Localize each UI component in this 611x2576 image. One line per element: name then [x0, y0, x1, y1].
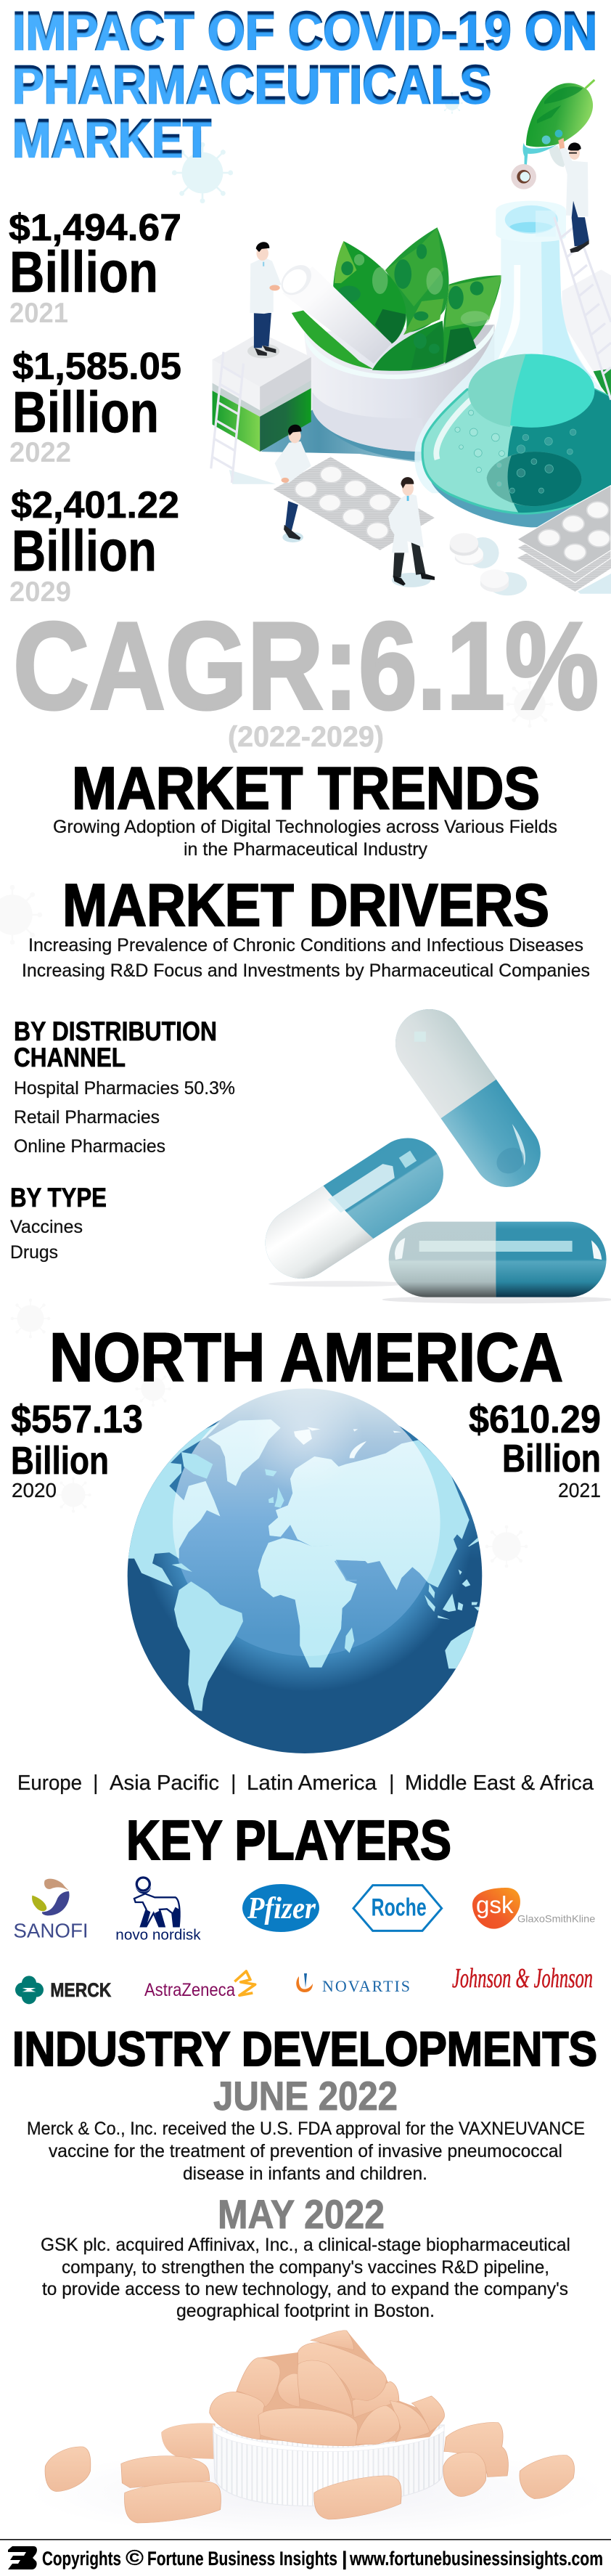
- scientist carrying blister: [275, 425, 311, 542]
- June 2022 text: vaccine for the treatment of prevention of invasive pneumococcal: [49, 2141, 562, 2161]
- June 2022 date: JUNE 2022: [213, 2073, 398, 2119]
- by distribution channel: CHANNEL: [14, 1043, 126, 1072]
- climbing ladder: [554, 205, 611, 400]
- footer copyright: ©: [126, 2546, 144, 2570]
- market drivers text: Increasing R&D Focus and Investments by Pharmaceutical Companies: [22, 961, 590, 981]
- by distribution channel: Retail Pharmacies: [14, 1107, 160, 1128]
- flask liquid: [422, 354, 611, 513]
- lower right blister stack: [517, 486, 611, 594]
- white tablets: [450, 533, 527, 595]
- market drivers heading: MARKET DRIVERS: [62, 871, 549, 939]
- logo: Merck: [15, 1976, 111, 2004]
- other regions: Middle East & Africa: [405, 1772, 594, 1795]
- logo: Sanofi: SANOFI: [13, 1920, 89, 1942]
- scientist on pedestal: [247, 242, 282, 359]
- footer copyright: [42, 2546, 603, 2570]
- June 2022 text: disease in infants and children.: [183, 2164, 427, 2184]
- footer logo: [8, 2546, 37, 2569]
- other regions: |: [93, 1772, 99, 1795]
- north america 2020 value: $557.13: [11, 1398, 143, 1441]
- falling drop: [521, 143, 557, 184]
- flask glass: [414, 201, 611, 493]
- white box behind flask: [562, 269, 611, 400]
- market value 2022: Billion: [12, 380, 159, 444]
- white cap: [213, 2425, 444, 2506]
- footer rule: [0, 2539, 611, 2540]
- pedestal box: [213, 333, 311, 452]
- logo: GSK: gsk: [476, 1892, 514, 1919]
- north america 2021 value: 2021: [558, 1479, 601, 1501]
- logo: Roche: Roche: [372, 1894, 427, 1921]
- other regions: Europe: [17, 1772, 82, 1795]
- pestle: [275, 259, 392, 364]
- June 2022 text: Merck & Co., Inc. received the U.S. FDA approval for the VAXNEUVANCE: [27, 2119, 585, 2139]
- logo: Sanofi: [13, 1879, 89, 1942]
- title: [12, 1, 597, 168]
- capsule bottom: [389, 1222, 607, 1297]
- by distribution channel: BY DISTRIBUTION: [14, 1016, 217, 1046]
- lens: [511, 164, 536, 189]
- market value 2029: Billion: [12, 518, 157, 583]
- market value 2029: [9, 484, 179, 608]
- by distribution channel: Online Pharmacies: [14, 1136, 165, 1157]
- logo: Merck: MERCK: [50, 1979, 111, 2001]
- background virus decorations: [0, 92, 553, 1568]
- by distribution channel: Hospital Pharmacies 50.3%: [14, 1078, 235, 1099]
- May 2022 text: company, to strengthen the company's vaccines R&D pipeline,: [62, 2257, 549, 2278]
- logo: GSK: GlaxoSmithKline: [517, 1912, 596, 1924]
- logo: AstraZeneca: AstraZeneca: [144, 1980, 235, 2000]
- by type: BY TYPE: [10, 1183, 107, 1212]
- market value 2022: 2022: [9, 437, 71, 468]
- other regions: |: [231, 1772, 237, 1795]
- mortar bowl: [304, 325, 494, 461]
- tablets in a white cap: [29, 2331, 607, 2539]
- capsules illustration: [252, 996, 611, 1303]
- logo: Novo Nordisk: [115, 1878, 201, 1943]
- market value 2021: Billion: [9, 240, 158, 304]
- north america 2021 value: [469, 1398, 601, 1501]
- north america 2020 value: Billion: [11, 1439, 109, 1483]
- scientist: [549, 138, 589, 253]
- other regions: [17, 1772, 594, 1795]
- flask base: [430, 478, 611, 527]
- market value 2029: $2,401.22: [11, 484, 179, 526]
- north america 2020 value: 2020: [12, 1479, 57, 1501]
- by distribution channel: [14, 1016, 235, 1157]
- tablet heap: [210, 2331, 444, 2446]
- other regions: |: [389, 1772, 395, 1795]
- other regions: Latin America: [247, 1772, 377, 1795]
- scattered tablets: [45, 2422, 575, 2523]
- logo: Pfizer: Pfizer: [247, 1892, 316, 1925]
- market value 2021: 2021: [9, 298, 68, 329]
- north america 2020 value: [11, 1398, 143, 1501]
- blister pack: [274, 457, 435, 550]
- market trends text: Growing Adoption of Digital Technologies across Various Fields: [53, 817, 557, 837]
- footer copyright: Fortune Business Insights: [147, 2548, 337, 2569]
- logo: Roche: [353, 1886, 442, 1931]
- title: PHARMACEUTICALS: [12, 54, 491, 115]
- footer copyright: Copyrights: [42, 2548, 121, 2569]
- footer copyright: |: [342, 2548, 348, 2569]
- tablet behind cap: [162, 2424, 215, 2459]
- May 2022 text: [41, 2235, 570, 2321]
- market trends text: in the Pharmaceutical Industry: [184, 839, 427, 860]
- by type: Vaccines: [10, 1217, 83, 1237]
- logo: GSK: [472, 1888, 596, 1929]
- market value 2021: [9, 207, 181, 329]
- logo: Novartis: NOVARTIS: [322, 1977, 410, 1995]
- walking scientist: [388, 477, 435, 587]
- logo: Pfizer: [242, 1884, 319, 1932]
- hero illustration: mortar, flask, blisters and scientists: [211, 201, 611, 595]
- leaves: [292, 227, 502, 371]
- June 2022 text: [27, 2119, 585, 2184]
- market trends text: [53, 817, 557, 860]
- logo: AstraZeneca: [144, 1971, 255, 2000]
- leaf: [526, 80, 594, 147]
- May 2022 text: GSK plc. acquired Affinivax, Inc., a clinical-stage biopharmaceutical: [41, 2235, 570, 2255]
- north america 2021 value: $610.29: [469, 1398, 601, 1441]
- other regions: Asia Pacific: [110, 1772, 219, 1795]
- capsule left: [252, 1125, 457, 1292]
- market drivers text: Increasing Prevalence of Chronic Conditions and Infectious Diseases: [28, 935, 583, 955]
- logo: Novartis: [296, 1973, 410, 1995]
- key players heading: KEY PLAYERS: [126, 1809, 451, 1872]
- market value 2021: $1,494.67: [9, 207, 181, 249]
- blister ladder: [211, 352, 276, 484]
- May 2022 text: geographical footprint in Boston.: [176, 2301, 435, 2321]
- May 2022 text: to provide access to new technology, and to expand the company's: [42, 2279, 568, 2299]
- by type: Drugs: [10, 1242, 58, 1263]
- continents: [123, 1419, 486, 1711]
- capsule top: [382, 996, 554, 1200]
- title: MARKET: [12, 108, 211, 168]
- market trends heading: MARKET TRENDS: [72, 754, 540, 822]
- market value 2029: 2029: [9, 576, 71, 608]
- by type: [10, 1183, 107, 1263]
- market value 2022: [9, 346, 181, 468]
- market value 2022: $1,585.05: [12, 346, 181, 388]
- globe: [123, 1377, 486, 1753]
- May 2022 date: MAY 2022: [218, 2191, 385, 2237]
- logo: Novo Nordisk: novo nordisk: [115, 1926, 201, 1943]
- ground shadow: [261, 407, 427, 462]
- CAGR figure: (2022-2029): [228, 721, 384, 753]
- leaf, droplet and scientist on ladder: [511, 80, 594, 253]
- market drivers text: [22, 935, 590, 981]
